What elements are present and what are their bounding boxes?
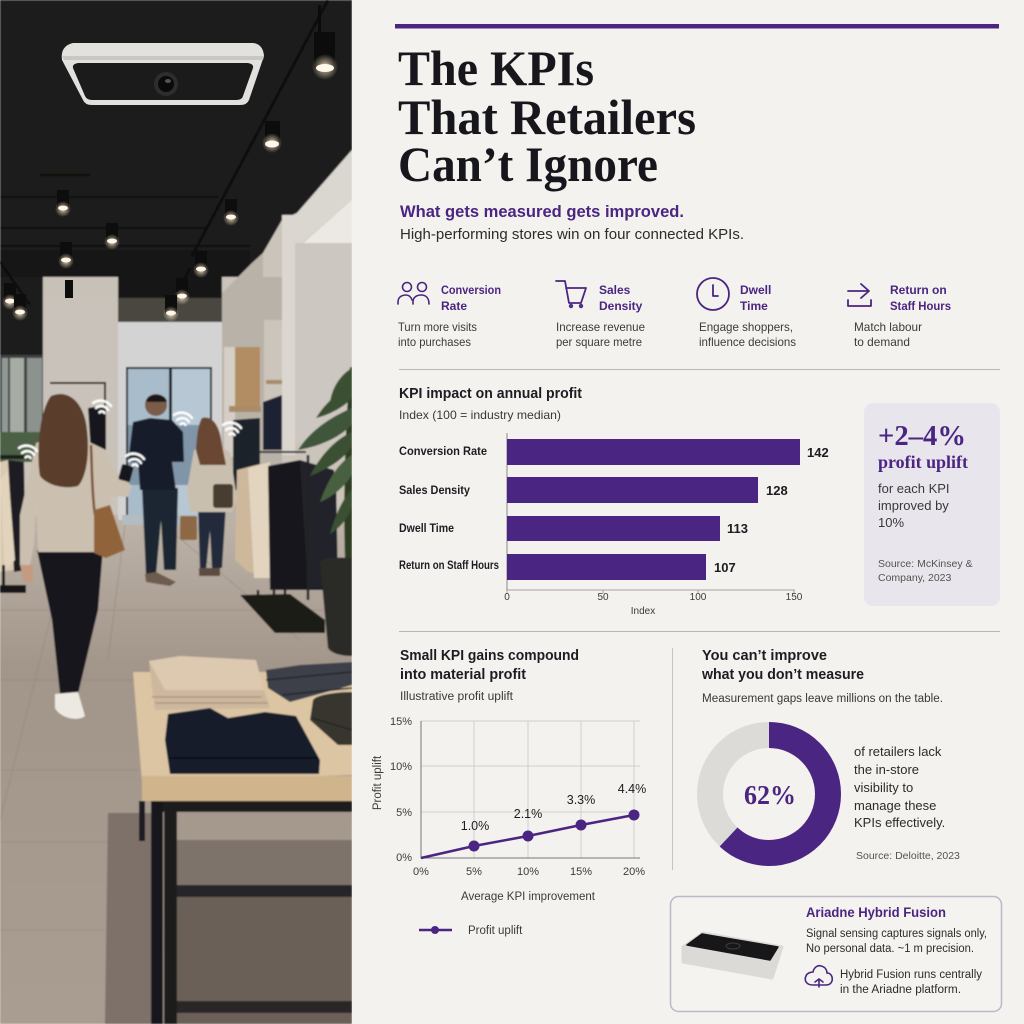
legend: Profit uplift	[468, 925, 523, 937]
shopper centre	[128, 394, 184, 586]
callout: profit uplift: profit uplift	[878, 452, 968, 472]
measurement heading: You can’t improve	[702, 648, 827, 664]
subtitle	[400, 203, 744, 243]
kpi: dwell time: Time	[740, 299, 768, 313]
bar chart: 100	[690, 592, 707, 603]
line chart: Profit uplift	[372, 755, 384, 810]
top rule	[395, 24, 999, 28]
donut chart: 62%	[744, 780, 796, 810]
callout: profit uplift: Source: McKinsey &	[878, 558, 973, 570]
kpi: sales density: Increase revenue	[556, 320, 645, 334]
ceiling sensor	[62, 43, 264, 105]
floor	[0, 515, 352, 1024]
signal icons	[19, 401, 241, 466]
bar chart	[399, 433, 829, 617]
table shadow	[105, 813, 352, 1024]
bar chart: 0	[504, 592, 510, 603]
bar chart heading	[399, 386, 582, 422]
store photograph	[0, 0, 352, 1024]
bar: return on staff hours	[399, 554, 736, 580]
donut caption: the in-store	[854, 762, 919, 777]
callout: profit uplift: +2–4%	[878, 421, 966, 452]
product card: Hybrid Fusion runs centrally	[840, 969, 982, 981]
line chart: 15%	[390, 716, 412, 728]
table	[133, 672, 352, 1024]
bar: conversion rate	[399, 439, 829, 465]
line chart: 10%	[390, 761, 412, 773]
measurement heading: what you don’t measure	[701, 667, 864, 683]
kpi: dwell time: Engage shoppers,	[699, 320, 793, 334]
bar chart: 150	[786, 592, 803, 603]
line chart: 5%	[396, 807, 412, 819]
product card: Ariadne Hybrid Fusion	[806, 905, 946, 920]
bar: return on staff hours: Return on Staff Hours	[399, 558, 499, 572]
kpi: dwell time: influence decisions	[699, 335, 796, 349]
bar chart: Index	[631, 606, 655, 617]
folded navy knitwear	[165, 708, 320, 774]
kpi: return on staff hours	[848, 283, 951, 349]
line chart: 0%	[413, 866, 429, 878]
line chart heading: Small KPI gains compound	[400, 648, 579, 664]
kpi: conversion rate: into purchases	[398, 335, 471, 349]
kpi: return on staff hours: Return on	[890, 283, 947, 297]
callout: profit uplift: improved by	[878, 498, 949, 513]
product device	[683, 933, 782, 978]
kpi: return on staff hours: Staff Hours	[890, 299, 951, 313]
donut caption: visibility to	[854, 780, 913, 795]
right wall	[222, 150, 352, 520]
right panel background	[352, 0, 1024, 1024]
shopper right	[180, 417, 237, 576]
left wall and glazing	[0, 297, 118, 497]
title: Can’t Ignore	[398, 136, 658, 192]
title	[398, 40, 696, 192]
donut caption	[854, 744, 960, 862]
kpi: conversion rate: Rate	[441, 299, 467, 313]
bar: dwell time	[399, 516, 748, 541]
donut caption: of retailers lack	[854, 744, 942, 759]
callout: profit uplift: 10%	[878, 515, 904, 530]
spotlights	[2, 5, 338, 322]
kpi: conversion rate: Turn more visits	[398, 320, 477, 334]
subtitle: High-performing stores win on four connected KPIs.	[400, 226, 744, 243]
line chart heading: into material profit	[400, 667, 526, 683]
kpi: sales density	[556, 281, 645, 349]
back corridor	[118, 320, 222, 525]
product card: No personal data. ~1 m precision.	[806, 943, 974, 955]
icon: cloud	[805, 966, 832, 987]
donut caption: Source: Deloitte, 2023	[856, 850, 960, 862]
kpi: conversion rate	[398, 282, 501, 349]
bar: dwell time: 113	[727, 521, 748, 536]
product card: in the Ariadne platform.	[840, 984, 961, 996]
ceiling	[0, 0, 352, 355]
kpi: dwell time: Dwell	[740, 283, 771, 297]
bar: dwell time: Dwell Time	[399, 521, 454, 535]
callout: profit uplift: Company, 2023	[878, 572, 952, 584]
kpi: sales density: Sales	[599, 283, 631, 297]
line chart heading: Illustrative profit uplift	[400, 691, 514, 703]
kpi: dwell time	[697, 278, 796, 349]
kpi: return on staff hours: Match labour	[854, 320, 922, 334]
line chart: 0%	[396, 852, 412, 864]
bar chart heading: KPI impact on annual profit	[399, 386, 582, 402]
donut chart	[710, 735, 828, 853]
bar: return on staff hours: 107	[714, 560, 736, 575]
donut caption: manage these	[854, 798, 936, 813]
planter	[320, 558, 352, 656]
line chart: 5%	[466, 866, 482, 878]
plant	[298, 367, 352, 560]
folded beige knitwear	[149, 656, 270, 710]
line chart	[372, 716, 646, 937]
line chart: 1.0%	[461, 819, 489, 833]
product card	[670, 896, 1002, 1012]
measurement heading	[701, 648, 943, 705]
kpi: conversion rate: Conversion	[441, 283, 501, 297]
line chart: 10%	[517, 866, 539, 878]
measurement heading: Measurement gaps leave millions on the table.	[702, 693, 943, 705]
bar chart: 50	[597, 592, 609, 603]
line chart: 15%	[570, 866, 592, 878]
bar: sales density: 128	[766, 483, 788, 498]
title: The KPIs	[398, 40, 594, 96]
bar: conversion rate: 142	[807, 445, 829, 460]
product card: Signal sensing captures signals only,	[806, 928, 987, 940]
right clothing rack	[235, 452, 338, 633]
line chart: 3.3%	[567, 793, 595, 807]
left clothing rack	[0, 455, 30, 593]
bar: conversion rate: Conversion Rate	[399, 444, 487, 458]
shopper left	[20, 394, 134, 719]
callout: profit uplift	[864, 403, 1000, 606]
line chart: Average KPI improvement	[461, 891, 596, 903]
line chart: 4.4%	[618, 782, 646, 796]
line chart: 20%	[623, 866, 645, 878]
line chart: 2.1%	[514, 807, 542, 821]
bar chart heading: Index (100 = industry median)	[399, 408, 561, 422]
bar: sales density	[399, 477, 788, 503]
folded grey knitwear	[266, 662, 352, 745]
callout: profit uplift: for each KPI	[878, 481, 950, 496]
kpi: return on staff hours: to demand	[854, 335, 910, 349]
ceiling tracks	[0, 0, 328, 312]
rear rail and garment	[50, 383, 106, 505]
kpi: sales density: Density	[599, 299, 643, 313]
subtitle: What gets measured gets improved.	[400, 203, 684, 221]
line chart heading	[400, 648, 579, 703]
donut caption: KPIs effectively.	[854, 815, 945, 830]
bar: sales density: Sales Density	[399, 483, 470, 497]
title: That Retailers	[398, 89, 696, 145]
profit uplift series	[421, 810, 640, 858]
kpi: sales density: per square metre	[556, 335, 642, 349]
legend	[419, 925, 523, 937]
